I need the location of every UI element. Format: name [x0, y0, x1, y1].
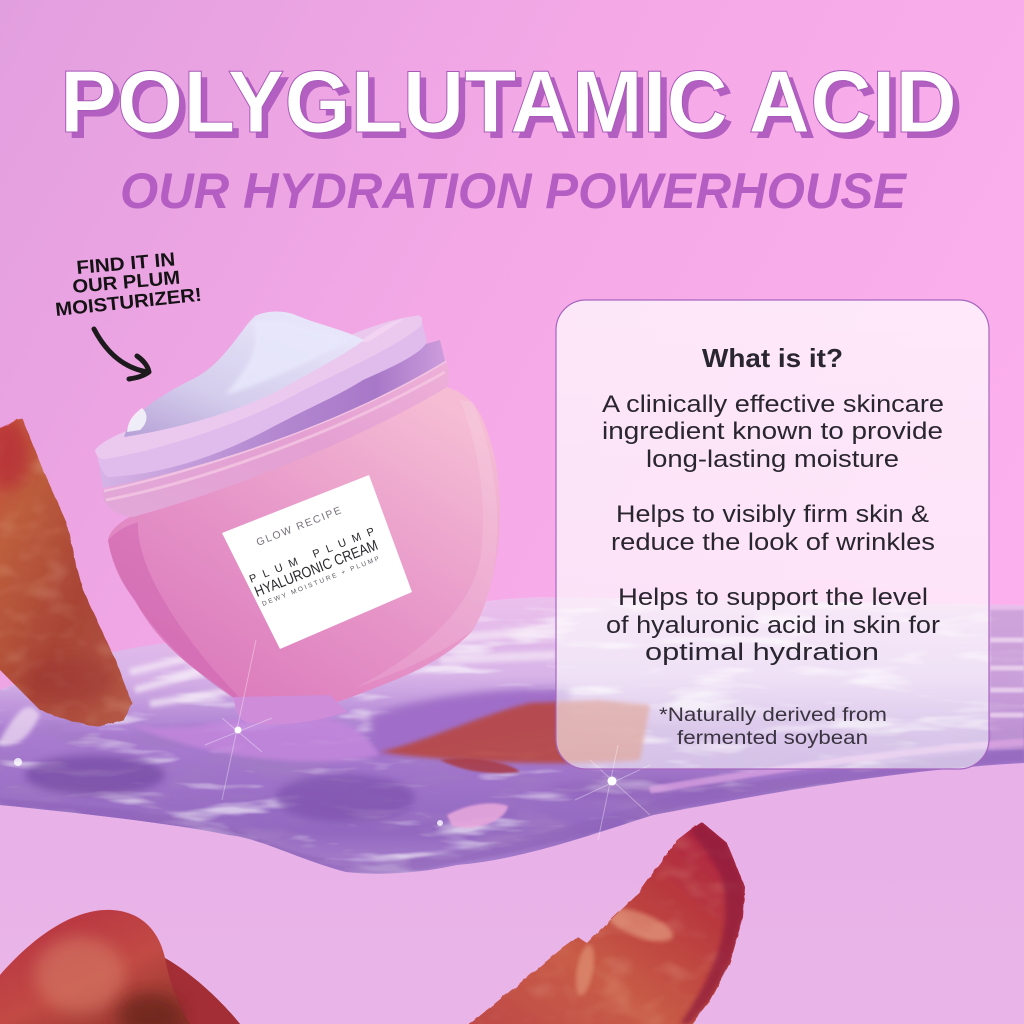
lid rim — [95, 315, 422, 459]
callout: MOISTURIZER! — [54, 285, 203, 321]
footnote: fermented soybean — [677, 728, 868, 749]
panel: what is it — [556, 300, 989, 769]
paragraph 1: ingredient known to provide — [602, 418, 943, 445]
callout: OUR PLUM — [72, 268, 181, 298]
cream — [124, 312, 364, 437]
paragraph 3: optimal hydration — [645, 639, 879, 666]
label text: product name: PLUM PLUMP — [248, 523, 383, 586]
label text: descriptor: DEWY MOISTURE + PLUMP — [261, 555, 382, 608]
jar ring — [102, 360, 449, 517]
title: POLYGLUTAMIC ACID — [66, 58, 963, 157]
submerged plum slice — [380, 700, 650, 773]
callout: FIND IT IN — [76, 249, 176, 279]
paragraph 3: Helps to support the level — [618, 584, 928, 611]
left plum slice — [0, 410, 140, 730]
paragraph 2: reduce the look of wrinkles — [611, 529, 935, 556]
title: POLYGLUTAMIC ACID — [60, 52, 957, 151]
paragraph 2: Helps to visibly firm skin & — [616, 501, 929, 528]
lid wall — [97, 322, 427, 477]
lower left plum slice — [0, 910, 240, 1024]
pale reflective streaks — [0, 630, 556, 745]
paragraph 3 — [606, 584, 940, 666]
right side bands — [990, 610, 1024, 750]
water surface — [0, 590, 1024, 880]
paragraph 3: of hyaluronic acid in skin for — [606, 612, 940, 639]
product jar — [95, 312, 500, 724]
pink droplet — [447, 803, 508, 828]
callout — [54, 249, 203, 321]
bottom edge band — [0, 755, 1024, 868]
paragraph 1 — [602, 391, 944, 473]
jar collar — [98, 340, 445, 488]
paragraph 1: long-lasting moisture — [646, 446, 899, 473]
panel heading: What is it? — [702, 343, 843, 373]
footnote: *Naturally derived from — [659, 705, 887, 726]
jar body — [108, 387, 500, 712]
label text: cream: HYALURONIC CREAM — [252, 537, 380, 601]
footnote — [659, 705, 887, 749]
arrow — [94, 329, 149, 379]
paragraph 1: A clinically effective skincare — [602, 391, 944, 418]
jar label — [222, 475, 412, 649]
label text: brand: GLOW RECIPE — [255, 504, 344, 549]
smooth purple pools — [370, 688, 570, 760]
subtitle: OUR HYDRATION POWERHOUSE — [120, 163, 908, 219]
paragraph 2 — [611, 501, 935, 556]
sparkle highlights — [14, 640, 650, 840]
lower right plum slice — [450, 820, 750, 1024]
